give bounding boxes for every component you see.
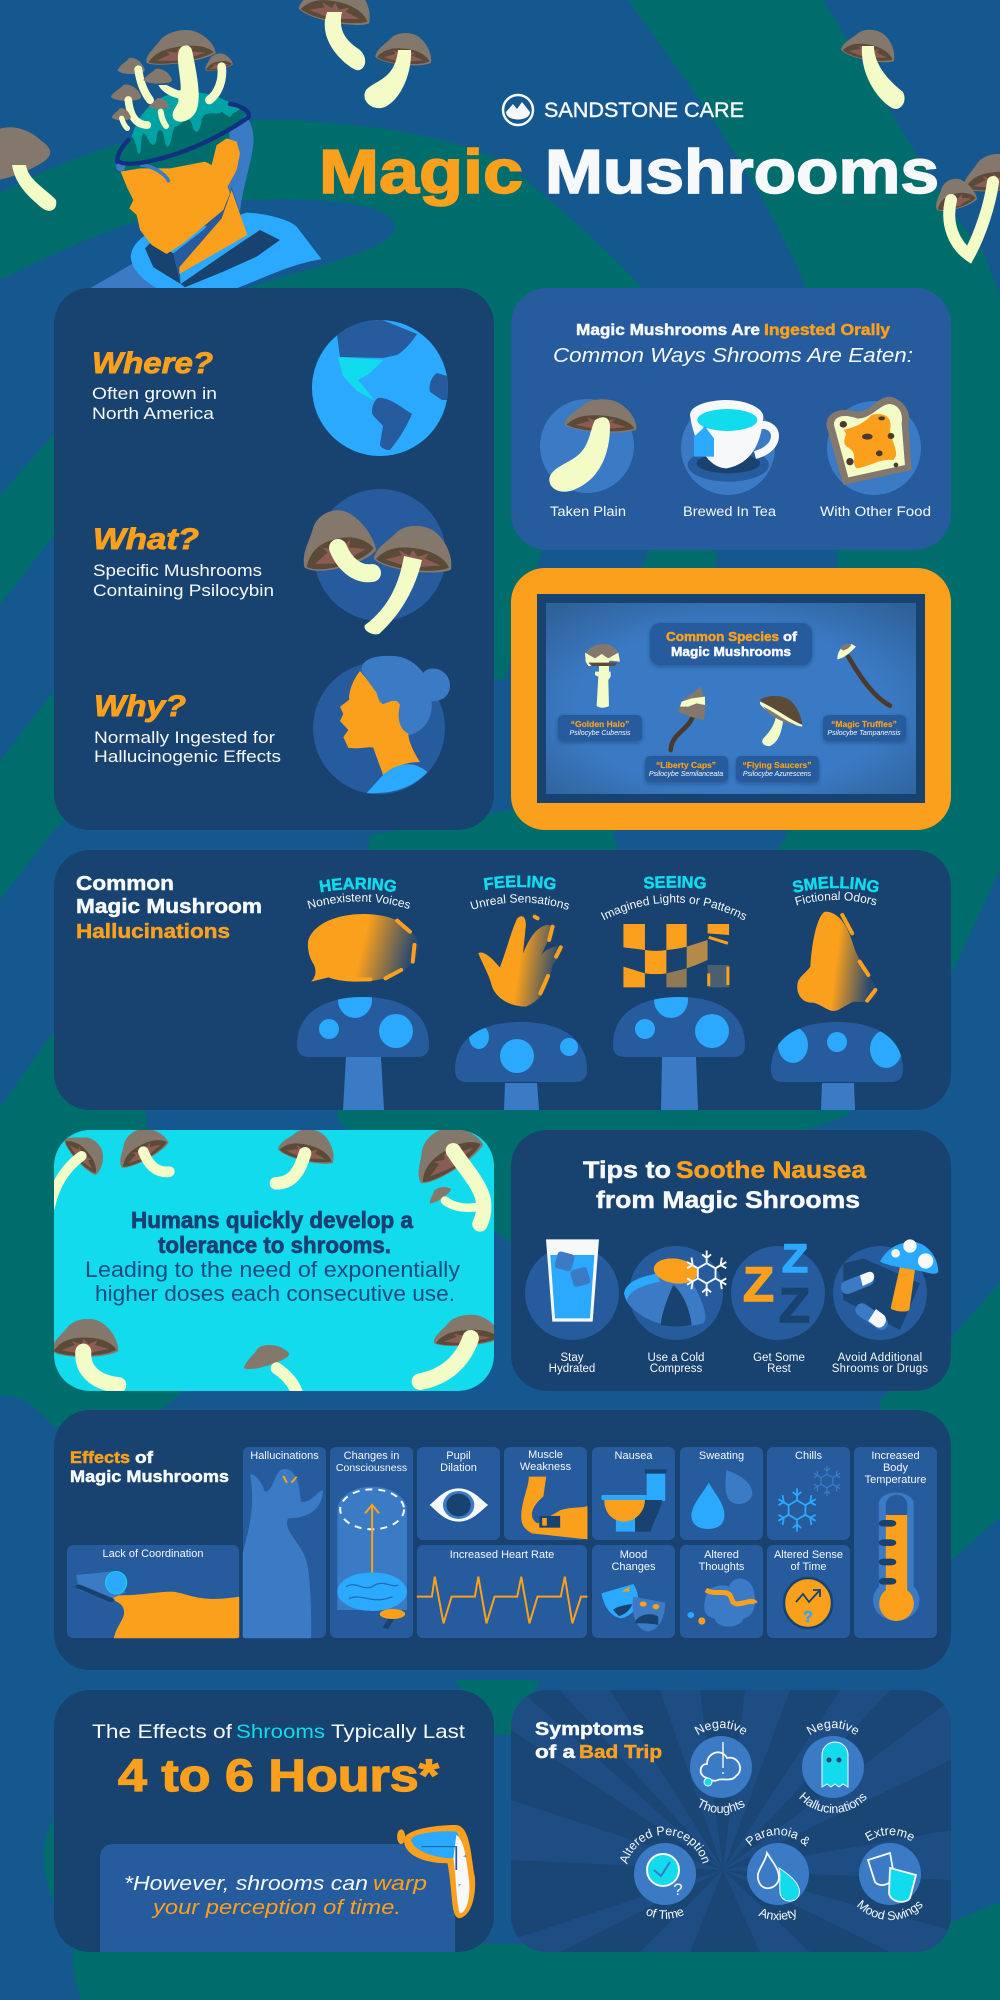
icon: cold compress [624,1246,726,1340]
smelling labels [792,876,879,906]
icon: sleep letters: Z [743,1259,774,1312]
header mushrooms: right edge pair [930,151,1000,255]
card: pupil dilation: Pupil [446,1450,471,1462]
callout text [85,1207,460,1306]
icon: magic truffles mushroom [837,644,890,706]
heading: Bad Trip [579,1741,662,1762]
callout text: Humans quickly develop a [131,1207,413,1233]
header mushroom: left edge [0,115,56,211]
card: pupil dilation [417,1447,500,1540]
labels: tips: Get Some [753,1352,805,1364]
text block: why [94,690,281,766]
card: altered thoughts [680,1545,763,1638]
heading [553,322,913,367]
card: increased body temperature: Body [883,1462,909,1474]
card: chills: Chills [795,1450,822,1462]
icon: globe [312,319,452,456]
card: pupil dilation: Dilation [440,1462,477,1474]
labels: ways eaten: Brewed In Tea [683,504,777,519]
symptom: negative thoughts [690,1720,752,1816]
heading: from Magic Shrooms [596,1187,860,1214]
card: warp perception note: *However, shrooms can [124,1873,368,1895]
card: nausea: Nausea [615,1450,653,1462]
panel: effects duration [54,1690,494,1952]
heading: Tips to [583,1157,671,1184]
text block: where [92,347,217,423]
callout text: higher doses each consecutive use. [95,1281,455,1306]
card: muscle weakness: Weakness [520,1461,572,1473]
mushroom pedestal: feeling [455,1022,587,1110]
panel: common species framed picture [511,568,951,830]
labels: tips: Shrooms or Drugs [832,1363,928,1375]
text block: where: Where? [92,347,213,380]
symptom: negative thoughts: Thoughts [699,1798,745,1816]
card: increased body temperature: Increased [871,1450,920,1462]
text block: where: North America [92,405,215,423]
header mushroom: top centre [297,0,376,70]
card: chills [767,1447,850,1540]
heading: Magic Mushroom [76,895,262,918]
feeling labels: Unreal Sensations [470,894,570,910]
feeling labels: FEELING [484,875,556,890]
card: hallucinations [243,1447,326,1638]
card: altered thoughts: Thoughts [699,1561,745,1573]
panel: symptoms of a bad trip [511,1690,951,1952]
mushroom pedestal: smelling [771,1022,903,1110]
icon: hand [478,916,562,1007]
card: changes in consciousness: Consciousness [336,1462,407,1474]
text block: why: Why? [94,690,186,723]
labels: tips: Hydrated [549,1363,595,1375]
symptom: extreme mood swings: Mood Swings [857,1900,922,1920]
card: hallucinations: Hallucinations [250,1450,319,1462]
card: lack of coordination [67,1545,239,1638]
symptom: altered perception of time [620,1826,708,1919]
icon: cup of tea [681,400,775,495]
card: altered sense of time: ? [803,1609,813,1626]
seeing labels: Imagined Lights or Patterns [600,894,746,920]
icon: glass of water [525,1239,619,1340]
panel: where what why [54,288,494,830]
heading: Magic Mushrooms [70,1468,229,1486]
symptom: extreme mood swings: Extreme [864,1828,914,1841]
labels: ways eaten: Taken Plain [550,504,626,519]
icon: sleep letters: Z [782,1237,808,1281]
title: Mushrooms [545,138,939,207]
symptom: altered perception of time: ? [673,1880,683,1899]
text block: where: Often grown in [92,385,217,403]
card: warp perception note [100,1844,455,1952]
heading: Ingested Orally [764,322,890,339]
heading: common species [650,623,812,665]
label: magic truffles: “Magic Truffles” [831,719,897,729]
icon: two mushrooms on circle [293,489,456,634]
illustration: person with mushrooms growing from open head [90,26,322,288]
card: altered thoughts: Altered [704,1549,739,1561]
icon: toast with mushrooms [826,397,921,495]
card: muscle weakness: Muscle [528,1449,563,1461]
heading: Symptoms [535,1718,644,1739]
card: warp perception note: your perception of time. [151,1897,401,1919]
icon: melting clock: 4 [463,1855,467,1859]
card: increased body temperature: Temperature [865,1474,926,1486]
feeling labels [470,875,570,910]
duration heading: Shrooms [236,1721,325,1743]
label: magic truffles: Psilocybe Tampanensis [827,730,901,737]
label: liberty caps [645,756,728,782]
panel: common hallucinations [54,850,951,1110]
label: liberty caps: Psilocybe Semilanceata [649,771,723,778]
label: flying saucers: Psilocybe Azurescens [743,771,812,778]
icon: flying saucers mushroom [760,696,803,746]
mushroom pedestal: hearing [297,997,429,1110]
labels: tips [549,1352,928,1375]
card: warp perception note: warp [373,1873,427,1895]
text block: what: What? [93,523,199,556]
heading: of [135,1449,154,1467]
icon: avoid pills and shrooms [833,1239,938,1340]
duration heading: Typically Last [331,1721,466,1743]
card: increased heart rate [417,1545,587,1638]
callout text: Leading to the need of exponentially [85,1257,460,1282]
card: mood changes [592,1545,675,1638]
labels: tips: Use a Cold [648,1352,704,1364]
heading: of a [535,1741,576,1762]
symptom: negative thoughts: Negative [694,1720,746,1735]
card: sweating: Sweating [699,1450,744,1462]
labels: ways eaten [550,504,931,519]
label: golden halo [558,715,642,741]
duration heading [92,1721,466,1743]
card: nausea [592,1447,675,1540]
card: mood changes: Changes [611,1561,656,1573]
callout text: tolerance to shrooms. [158,1232,391,1258]
decorative mushrooms around callout [50,1114,501,1392]
icon: liberty caps mushroom [671,687,706,750]
icon: sleep letters: Z [779,1280,810,1333]
card: increased heart rate: Increased Heart Rate [450,1549,554,1561]
heading: Common [76,872,174,895]
symptom: altered perception of time: of Time [646,1908,684,1919]
seeing labels: SEEING [644,876,706,889]
icon: woman profile on circle [313,656,450,794]
text block: why: Hallucinogenic Effects [94,748,281,766]
title [319,138,939,207]
hearing labels: Nonexistent Voices [307,893,410,909]
heading: Common Ways Shrooms Are Eaten: [553,345,913,367]
header mushroom: second top centre [364,30,434,108]
text block: why: Normally Ingested for [94,729,276,747]
icon: nose [797,912,876,1011]
card: mood changes: Mood [620,1549,647,1561]
duration heading: The Effects of [92,1721,233,1743]
text block: what: Specific Mushrooms [93,562,262,580]
heading: Magic Mushrooms Are [576,322,760,339]
heading: Hallucinations [76,920,230,943]
heading [583,1157,867,1214]
symptom: paranoia and anxiety: Anxiety [758,1908,796,1920]
heading [70,1449,229,1486]
panel: ingested orally [511,288,951,550]
symptom: altered perception of time: Altered Perception [620,1826,708,1864]
icon: golden halo mushroom [585,644,620,708]
heading: common species: Magic Mushrooms [671,644,791,659]
label: flying saucers: “Flying Saucers” [743,760,811,770]
card: altered sense of time: Altered Sense [774,1549,843,1561]
label: magic truffles [823,715,906,741]
symptom: extreme mood swings [857,1828,922,1920]
icon: speech bubble [308,914,419,982]
heading: common species: Common Species [666,629,779,644]
text block: what: Containing Psilocybin [93,582,274,600]
heading: Soothe Nausea [676,1157,867,1184]
icon: sleep letters [731,1237,825,1340]
symptom: negative hallucinations: Hallucinations [799,1792,866,1814]
icon: plain mushroom [540,397,638,493]
heading [76,872,262,943]
card: changes in consciousness [330,1447,413,1638]
title: Magic [319,138,523,207]
heading: Effects [70,1449,130,1467]
card: altered sense of time [767,1545,850,1638]
header mushroom: top right [840,24,905,109]
symptom: paranoia and anxiety: Paranoia & [745,1828,810,1846]
card: sweating [680,1447,763,1540]
labels: tips: Rest [767,1363,792,1375]
panel: tolerance callout [50,1114,501,1392]
label: flying saucers [736,756,819,782]
label: liberty caps: “Liberty Caps” [656,760,716,770]
big number: 4 to 6 hours: 4 to 6 Hours* [118,1750,440,1801]
seeing labels [600,876,746,920]
card: altered sense of time: of Time [790,1561,827,1573]
logo: Sandstone Care: SANDSTONE CARE [544,99,744,122]
card: changes in consciousness: Changes in [344,1450,399,1462]
symptom: negative hallucinations: Negative [806,1720,858,1735]
labels: tips: Compress [650,1363,702,1375]
labels: ways eaten: With Other Food [820,504,931,519]
heading: common species: of [783,629,798,644]
text block: what [93,523,274,600]
panel: effects of magic mushrooms [54,1410,951,1670]
labels: tips: Stay [560,1352,584,1364]
icon: melting clock [397,1825,475,1918]
heading [535,1718,662,1762]
labels: tips: Avoid Additional [838,1352,922,1364]
symptom: negative hallucinations [799,1720,866,1814]
logo: Sandstone Care [503,95,744,125]
label: golden halo: Psilocybe Cubensis [569,730,631,737]
panel: tips to soothe nausea [511,1130,951,1391]
card: increased body temperature [854,1447,937,1638]
card: lack of coordination: Lack of Coordination [103,1548,203,1560]
card: muscle weakness [504,1447,587,1540]
hearing labels [307,877,410,909]
smelling labels: Fictional Odors [795,891,876,906]
hearing labels: HEARING [319,877,396,892]
symptom: paranoia and anxiety [745,1828,810,1920]
icon: warped checker pattern [623,924,729,987]
icon: melting clock: 7 [457,1884,461,1888]
smelling labels: SMELLING [792,876,879,892]
label: golden halo: “Golden Halo” [571,719,629,729]
mushroom pedestal: seeing [613,997,745,1110]
